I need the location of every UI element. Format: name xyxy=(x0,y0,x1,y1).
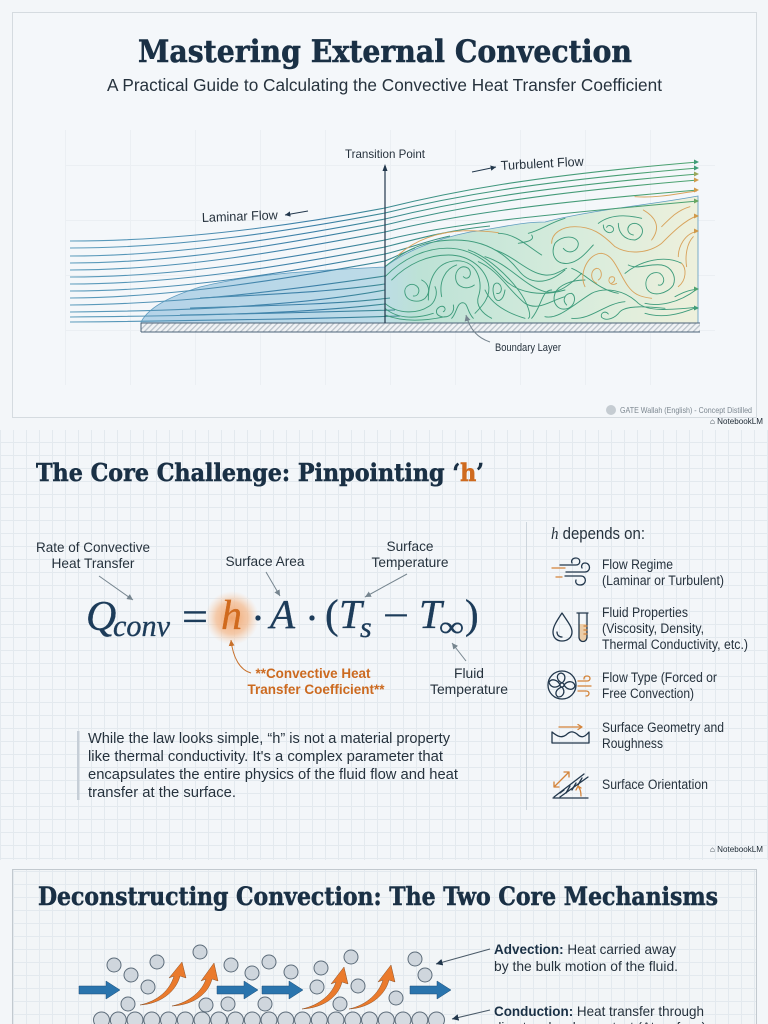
surface particle row xyxy=(94,1012,444,1024)
annotation: surface temperature: Temperature xyxy=(372,554,449,570)
streamlines xyxy=(70,162,698,322)
annotation: rate of convective heat transfer: Rate of Convective xyxy=(36,539,150,555)
flow arrowheads xyxy=(694,160,699,310)
icon: drop and test tube xyxy=(553,613,588,642)
annotation: surface area xyxy=(226,553,305,596)
explanatory note: While the law looks simple, “h” is not a material property xyxy=(88,730,450,747)
annotation: convective heat transfer coefficient: Transfer Coefficient** xyxy=(248,681,385,697)
equation: = xyxy=(182,595,208,641)
equation: h xyxy=(221,593,242,639)
factor: surface orientation xyxy=(553,772,708,798)
annotation: convective heat transfer coefficient: **Convective Heat xyxy=(256,665,371,681)
icon: fan and air xyxy=(548,671,591,699)
equation: T xyxy=(339,591,365,637)
watermark: ⌂ NotebookLM xyxy=(710,417,763,426)
factor: surface orientation: Surface Orientation xyxy=(602,777,708,792)
label: turbulent flow: Turbulent Flow xyxy=(500,154,585,173)
equation: conv xyxy=(113,608,170,643)
transition point marker xyxy=(345,147,426,323)
callout: conduction xyxy=(452,1003,706,1024)
equation: · xyxy=(251,596,265,642)
factor: flow type xyxy=(548,670,717,701)
label: laminar flow: Laminar Flow xyxy=(202,207,279,225)
flat plate xyxy=(141,323,700,332)
moving fluid particles xyxy=(107,945,432,1012)
annotation: fluid temperature xyxy=(430,643,508,697)
explanatory note xyxy=(77,730,459,801)
factor: fluid properties xyxy=(553,605,748,652)
divider xyxy=(526,522,527,810)
annotation: surface temperature: Surface xyxy=(386,538,434,554)
factor: flow regime: (Laminar or Turbulent) xyxy=(602,573,724,588)
factor: flow type: Flow Type (Forced or xyxy=(602,670,717,685)
equation xyxy=(86,591,479,644)
title: Mastering External Convection xyxy=(138,34,632,70)
equation: − xyxy=(383,595,409,637)
callout: advection: Advection: Heat carried away xyxy=(494,941,676,957)
annotation: surface temperature xyxy=(365,538,449,597)
callout: conduction: Conduction: Heat transfer through xyxy=(494,1003,704,1019)
equation: s xyxy=(360,611,372,644)
blue bulk flow arrows xyxy=(79,981,451,999)
subtitle: A Practical Guide to Calculating the Convective Heat Transfer Coefficient xyxy=(107,75,662,95)
panel: two core mechanisms xyxy=(12,870,756,1024)
factor: flow type: Free Convection) xyxy=(602,686,694,701)
equation: · xyxy=(305,596,319,642)
explanatory note: encapsulates the entire physics of the fluid flow and heat xyxy=(88,766,459,783)
label: boundary layer xyxy=(466,315,561,354)
factor: flow regime: Flow Regime xyxy=(602,557,673,572)
equation: ∞ xyxy=(439,612,464,643)
highlight glow xyxy=(205,591,259,645)
panel: boundary layer overview xyxy=(12,12,756,418)
label: boundary layer: Boundary Layer xyxy=(495,342,561,354)
callout: advection: by the bulk motion of the fluid. xyxy=(494,958,678,974)
list heading: h depends on: xyxy=(551,524,645,543)
turbulent eddies xyxy=(385,216,697,320)
factor: flow regime xyxy=(552,557,724,588)
icon: wind swirls xyxy=(552,558,590,585)
equation: ) xyxy=(465,591,479,637)
equation: Q xyxy=(86,594,116,640)
annotation: fluid temperature: Temperature xyxy=(430,681,508,697)
factor: surface geometry: Roughness xyxy=(602,736,663,751)
icon: inclined plate xyxy=(553,772,588,798)
annotation: rate of convective heat transfer: Heat Transfer xyxy=(52,555,135,571)
explanatory note: like thermal conductivity. It's a complex parameter that xyxy=(88,748,444,765)
factor: fluid properties: (Viscosity, Density, xyxy=(602,621,704,636)
annotation: convective heat transfer coefficient xyxy=(231,640,385,697)
watermark: ⌂ NotebookLM xyxy=(710,845,763,854)
panel: core challenge xyxy=(36,458,748,810)
equation: A xyxy=(267,591,296,637)
icon: rough surface xyxy=(552,724,589,743)
annotation: rate of convective heat transfer xyxy=(36,539,150,600)
equation: ( xyxy=(325,591,339,637)
annotation: surface area: Surface Area xyxy=(226,553,305,569)
factor: fluid properties: Fluid Properties xyxy=(602,605,688,620)
factor: surface geometry: Surface Geometry and xyxy=(602,720,724,735)
orange heat arrows xyxy=(140,962,395,1009)
annotation: fluid temperature: Fluid xyxy=(454,665,484,681)
warm flow lines xyxy=(398,191,697,298)
factor: fluid properties: Thermal Conductivity, etc.) xyxy=(602,637,748,652)
explanatory note: transfer at the surface. xyxy=(88,784,236,801)
transition point marker: Transition Point xyxy=(345,147,426,161)
factor: surface geometry xyxy=(552,720,724,751)
equation: T xyxy=(419,591,445,637)
boundary layer fill xyxy=(141,196,698,323)
section heading: The Core Challenge: Pinpointing ‘h’ xyxy=(36,458,484,487)
callout: advection xyxy=(436,941,678,974)
